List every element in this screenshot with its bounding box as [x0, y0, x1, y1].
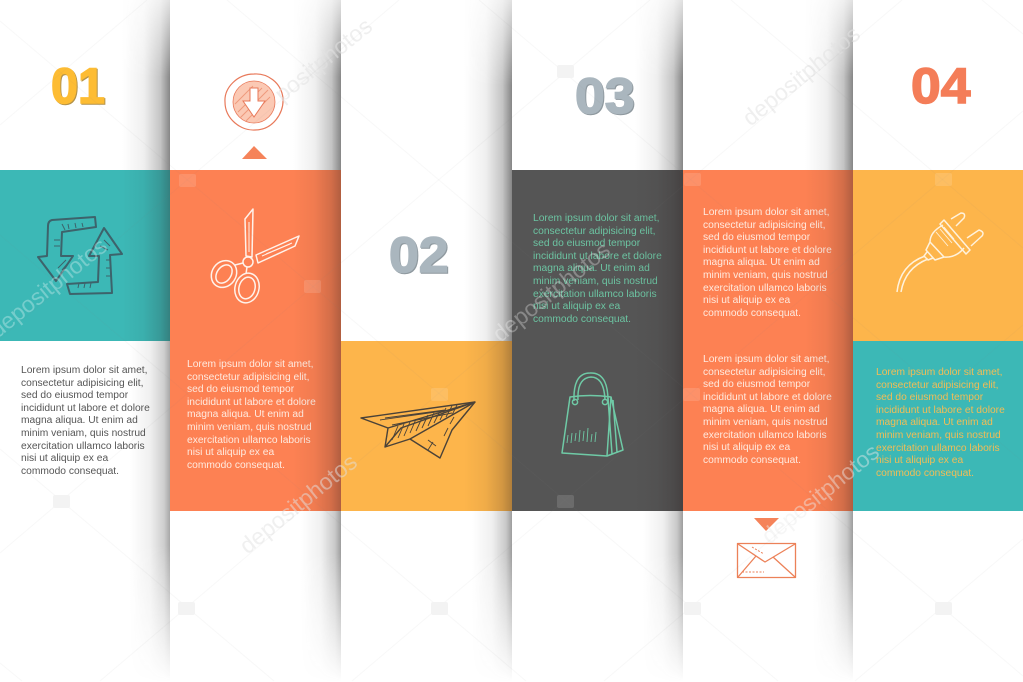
panel: column 6: [853, 170, 1023, 511]
panel: column 5: [683, 0, 853, 670]
panel: column 3: [341, 0, 512, 670]
panel: column 2: [170, 0, 341, 670]
panel: column 4: [512, 0, 683, 670]
number 04: 04: [911, 58, 971, 114]
dark band: [512, 170, 683, 511]
number 03: 03: [576, 69, 636, 125]
watermark text: depositphotos: [737, 20, 865, 131]
icon: paper plane: [361, 402, 475, 458]
icon: plug: [897, 213, 983, 292]
watermark text: depositphotos: [234, 448, 362, 559]
arrow: up triangle: [242, 146, 267, 159]
text block 4: Lorem ipsum dolor sit amet, consectetur adipisicing elit, sed do eiusmod tempor incididunt ut labore et dolore magna aliqua. Ut enim ad minim veniam, quis nostrud exercitation ullamco laboris nisi ut aliquip ex ea commodo consequat.: [703, 207, 832, 319]
watermark text: positphotos: [269, 13, 377, 107]
number 03: 03: [575, 68, 635, 124]
teal band: [853, 341, 1023, 511]
text block 5: Lorem ipsum dolor sit amet, consectetur adipisicing elit, sed do eiusmod tempor incididunt ut labore et dolore magna aliqua. Ut enim ad minim veniam, quis nostrud exercitation ullamco laboris nisi ut aliquip ex ea commodo consequat.: [703, 354, 832, 466]
number 01: 01: [51, 58, 105, 114]
teal band: [0, 170, 170, 341]
icon: download circle: [225, 74, 283, 130]
icon: scissors: [206, 209, 299, 306]
number 01: 01: [52, 59, 106, 115]
watermark text: depositphotos: [487, 236, 615, 347]
panel: column 1: [0, 0, 170, 668]
yellow band: [853, 170, 1023, 341]
text block 6: Lorem ipsum dolor sit amet, consectetur adipisicing elit, sed do eiusmod tempor incididunt ut labore et dolore magna aliqua. Ut enim ad minim veniam, quis nostrud exercitation ullamco laboris nisi ut aliquip ex ea commodo consequat.: [876, 367, 1005, 479]
text block 3: Lorem ipsum dolor sit amet, consectetur adipisicing elit, sed do eiusmod tempor incididunt ut labore et dolore magna aliqua. Ut enim ad minim veniam, quis nostrud exercitation ullamco laboris nisi ut aliquip ex ea commodo consequat.: [533, 213, 662, 325]
orange band: [683, 170, 853, 511]
icon: recycle arrows: [38, 217, 122, 294]
orange band: [170, 170, 341, 511]
text block 1: Lorem ipsum dolor sit amet, consectetur adipisicing elit, sed do eiusmod tempor incididunt ut labore et dolore magna aliqua. Ut enim ad minim veniam, quis nostrud exercitation ullamco laboris nisi ut aliquip ex ea commodo consequat.: [21, 365, 150, 477]
text block 2: Lorem ipsum dolor sit amet, consectetur adipisicing elit, sed do eiusmod tempor incididunt ut labore et dolore magna aliqua. Ut enim ad minim veniam, quis nostrud exercitation ullamco laboris nisi ut aliquip ex ea commodo consequat.: [187, 359, 316, 471]
icon: shopping bag: [562, 373, 623, 456]
number 02: 02: [389, 227, 449, 283]
icon: envelope: [738, 544, 796, 578]
yellow band: [341, 341, 512, 511]
arrow: down triangle: [754, 518, 779, 531]
watermark text: depositphotos: [756, 438, 884, 549]
number 02: 02: [390, 228, 450, 284]
